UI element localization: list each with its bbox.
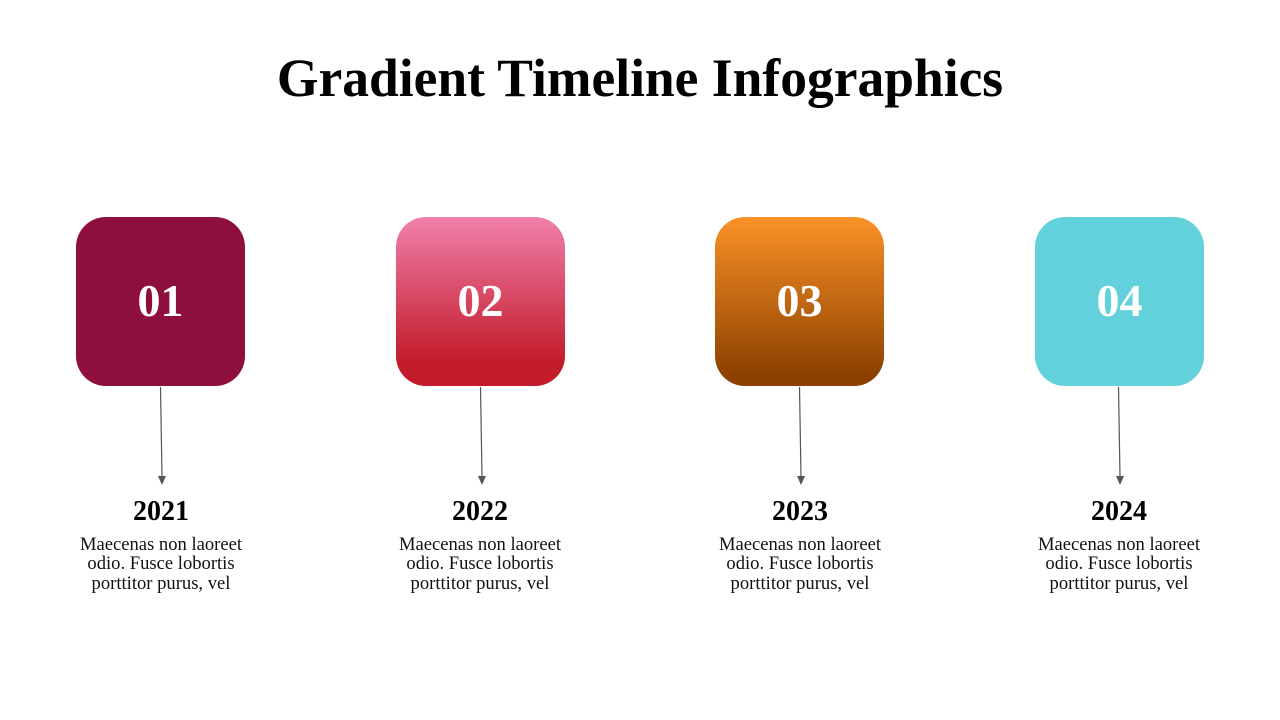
card 03: 03 bbox=[776, 275, 822, 326]
text 2021 bbox=[80, 534, 242, 594]
card 02 bbox=[396, 217, 565, 386]
text 2024: Maecenas non laoreet bbox=[1038, 534, 1200, 555]
year 2024: 2024 bbox=[1091, 496, 1147, 527]
text 2022 bbox=[399, 534, 561, 594]
card 02: 02 bbox=[458, 275, 504, 326]
card 04: 04 bbox=[1096, 275, 1142, 326]
text 2022: porttitor purus, vel bbox=[411, 573, 549, 594]
year 2022: 2022 bbox=[452, 496, 508, 527]
text 2022: odio. Fusce lobortis bbox=[406, 553, 554, 574]
text 2024: odio. Fusce lobortis bbox=[1045, 553, 1193, 574]
text 2021: odio. Fusce lobortis bbox=[87, 553, 235, 574]
text 2021: porttitor purus, vel bbox=[92, 573, 230, 594]
text 2024: porttitor purus, vel bbox=[1050, 573, 1188, 594]
year 2023: 2023 bbox=[772, 496, 828, 527]
card 04 bbox=[1035, 217, 1204, 386]
text 2023 bbox=[719, 534, 881, 594]
text 2023: odio. Fusce lobortis bbox=[726, 553, 874, 574]
card 03 bbox=[715, 217, 884, 386]
card 01 bbox=[76, 217, 245, 386]
text 2023: porttitor purus, vel bbox=[731, 573, 869, 594]
title: Gradient Timeline Infographics bbox=[277, 48, 1003, 108]
year 2021: 2021 bbox=[133, 496, 189, 527]
text 2024 bbox=[1038, 534, 1200, 594]
card 01: 01 bbox=[138, 275, 184, 326]
text 2023: Maecenas non laoreet bbox=[719, 534, 881, 555]
text 2021: Maecenas non laoreet bbox=[80, 534, 242, 555]
text 2022: Maecenas non laoreet bbox=[399, 534, 561, 555]
